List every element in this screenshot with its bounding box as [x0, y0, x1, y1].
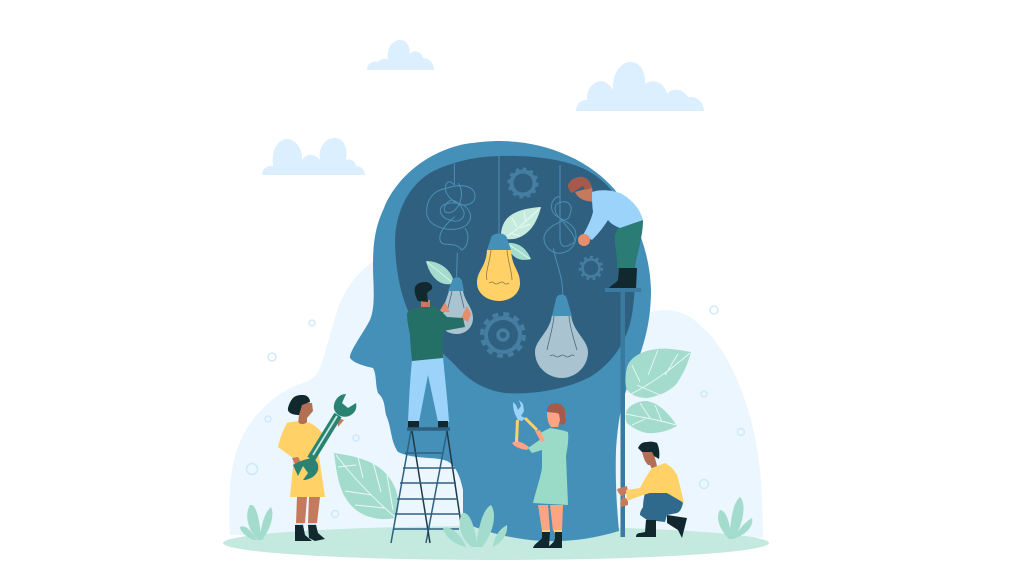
socks [542, 530, 562, 532]
hair [568, 177, 592, 193]
leaf: right lower [626, 401, 677, 433]
plant: left [240, 505, 272, 540]
boots [295, 525, 325, 541]
person on pole [568, 177, 643, 289]
woman with wrench [278, 394, 356, 541]
neck and face [298, 403, 313, 425]
hair and bun [547, 403, 566, 425]
back boot [667, 515, 687, 538]
neck and face [642, 450, 658, 470]
ground [223, 526, 769, 560]
hand [292, 457, 302, 466]
leaf: left bulb [426, 261, 454, 284]
pliers head [513, 400, 525, 421]
face [547, 412, 560, 427]
pale background blob: left [229, 262, 480, 535]
person on ladder [407, 282, 471, 428]
bubbles [246, 306, 744, 518]
arm and hands [512, 430, 545, 450]
torso and arm [583, 190, 643, 240]
cloud: top centre [367, 40, 434, 70]
trousers [615, 220, 643, 268]
torso and arm [407, 305, 465, 361]
neck [421, 300, 430, 307]
woman with pliers [512, 400, 568, 548]
gear: small right [580, 257, 602, 279]
tangled scribble: right [544, 165, 576, 295]
boots [533, 532, 562, 548]
hair [415, 282, 432, 302]
hands [439, 302, 471, 322]
leaf: large lower left [334, 453, 398, 519]
tangled scribble: left [427, 163, 475, 277]
dress [528, 428, 568, 505]
leaf: centre bulb lower [507, 243, 531, 260]
gear: large centre [482, 314, 524, 356]
gear: top [509, 169, 537, 197]
ladder [391, 429, 462, 543]
trousers [640, 491, 683, 522]
boots [608, 268, 637, 289]
head silhouette [350, 141, 651, 541]
person kneeling [617, 442, 687, 538]
grey light bulb: left [441, 277, 473, 334]
face [575, 187, 594, 202]
pale background blob: right [600, 310, 763, 538]
wrench [293, 394, 356, 480]
hand [578, 234, 590, 246]
hair [638, 442, 659, 459]
cloud: top right [576, 62, 704, 111]
dress [278, 421, 325, 497]
leaf: centre bulb upper [501, 207, 541, 239]
legs [408, 357, 449, 422]
shoes [408, 421, 448, 428]
plant: centre [443, 505, 507, 547]
sweater [626, 463, 684, 503]
brain dark area [395, 156, 635, 393]
grey light bulb: large [535, 294, 588, 378]
hair [288, 395, 310, 415]
plant: right [718, 497, 752, 539]
socks [296, 523, 316, 525]
centre bulb cord [498, 156, 500, 236]
front boot [636, 520, 656, 537]
leaf: right upper [626, 349, 691, 398]
yellow light bulb [477, 234, 520, 301]
legs [538, 505, 563, 531]
hand on wrench [337, 418, 344, 427]
legs [296, 497, 320, 523]
cloud: left [262, 138, 365, 175]
pole and platform [605, 288, 641, 537]
pliers handles [516, 418, 537, 442]
hands [617, 486, 628, 507]
